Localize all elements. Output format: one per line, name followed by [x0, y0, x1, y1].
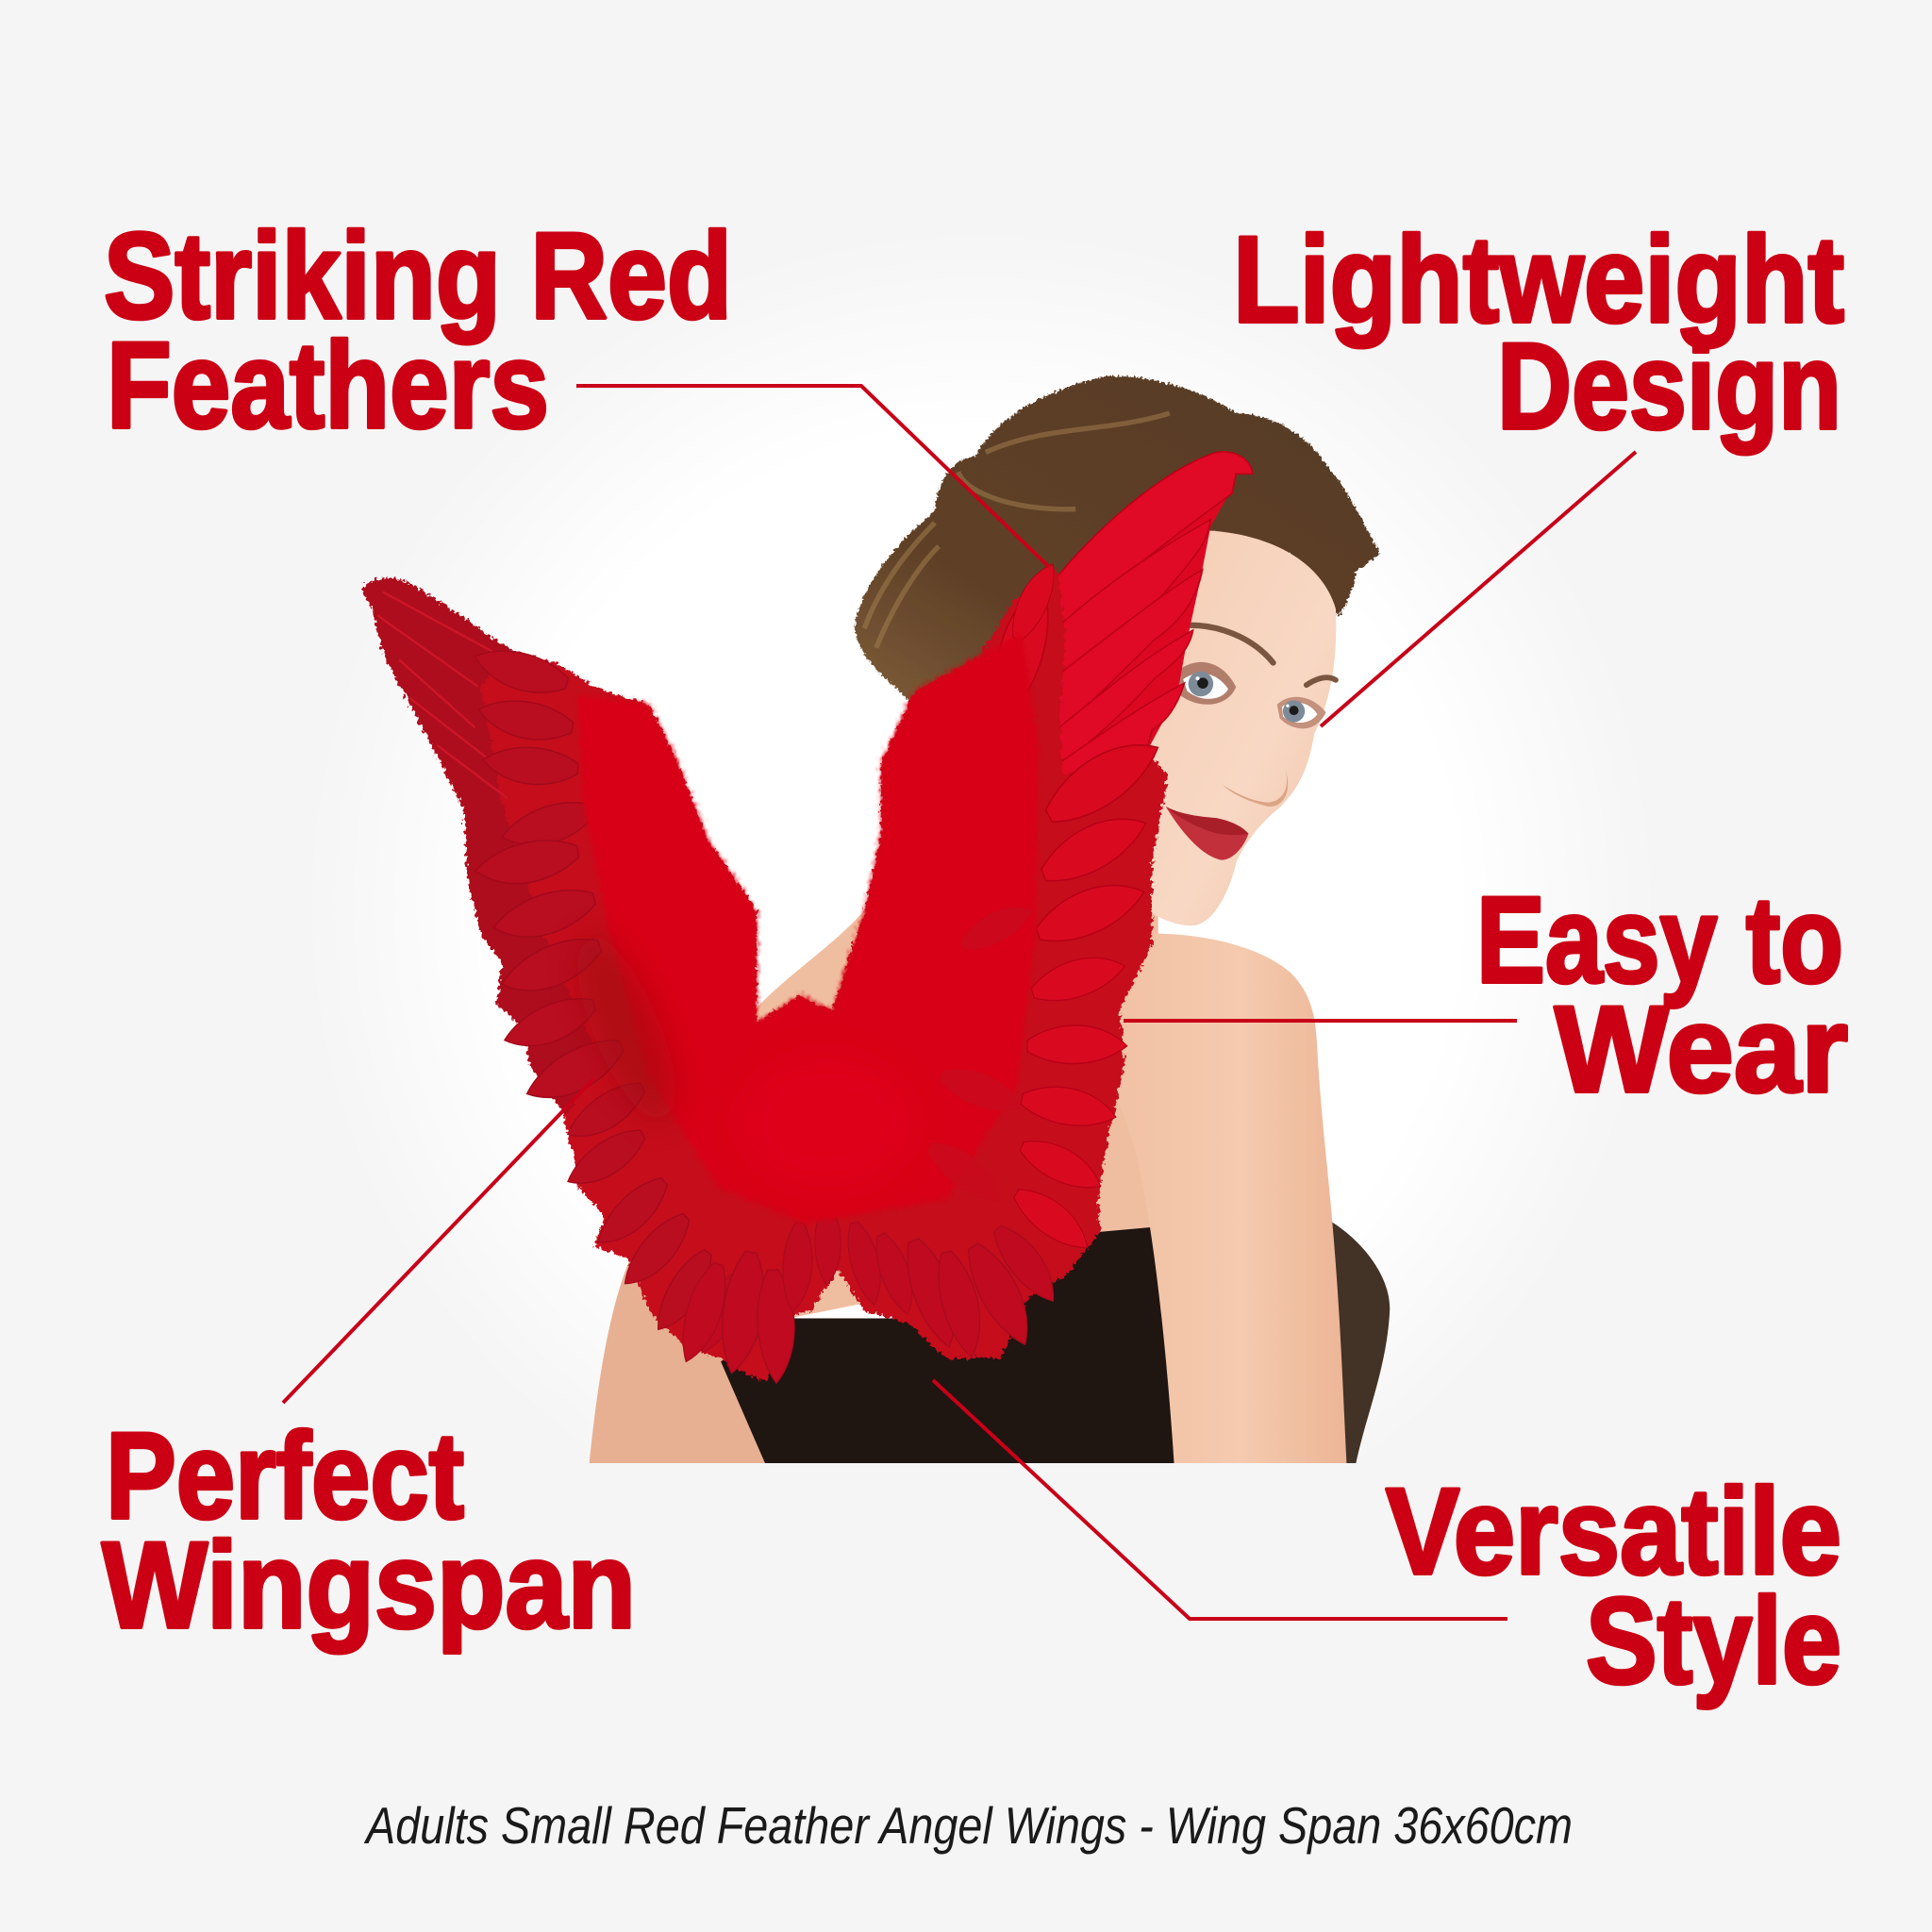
woman's body — [589, 909, 1390, 1466]
feather backing — [1098, 498, 1226, 745]
heading: Perfect Wingspan: Wingspan — [102, 1516, 636, 1654]
heading: Versatile Style: Style — [1586, 1572, 1841, 1709]
face — [1130, 530, 1336, 925]
white photo backdrop — [475, 400, 1487, 1319]
bottom feather fringe — [672, 1206, 1066, 1384]
heading: Versatile Style: Versatile — [1386, 1462, 1841, 1600]
nose — [1223, 769, 1288, 807]
leader line: lightweight design — [1321, 452, 1636, 726]
heading: Easy to Wear — [1476, 871, 1848, 1118]
heading: Lightweight Design: Lightweight — [1233, 210, 1844, 348]
heading: Easy to Wear: Wear — [1555, 980, 1848, 1118]
left wing covert feathers — [471, 641, 722, 1340]
eye right — [1277, 697, 1326, 728]
hair — [855, 376, 1381, 703]
heading: Striking Red Feathers: Striking Red — [104, 207, 732, 344]
eyebrows — [1187, 625, 1336, 685]
black top, back — [721, 1227, 1180, 1466]
heading: Perfect Wingspan — [102, 1407, 636, 1654]
heading: Striking Red Feathers — [104, 207, 732, 454]
left arm — [589, 1257, 766, 1466]
right arm and shoulder — [1150, 934, 1347, 1463]
wing shadow — [558, 923, 695, 1134]
heading: Lightweight Design: Design — [1497, 317, 1841, 455]
bright centre glow — [741, 1058, 913, 1188]
fluffy marabou centre — [578, 633, 1038, 1223]
heading: Lightweight Design — [1233, 210, 1844, 455]
heading: Versatile Style — [1386, 1462, 1841, 1709]
red feather wings — [361, 557, 1168, 1384]
primary feathers right wing — [1057, 451, 1253, 775]
right inner shaded feathers — [922, 895, 1039, 1213]
heading: Easy to Wear: Easy to — [1476, 871, 1843, 1008]
leader line: perfect wingspan — [283, 1078, 594, 1403]
wing silhouette — [361, 568, 1168, 1382]
leader line: striking red feathers — [576, 386, 1049, 567]
leader line: easy to wear — [1124, 1019, 1517, 1023]
heading: Striking Red Feathers: Feathers — [107, 316, 549, 454]
leader line: versatile style — [933, 1380, 1507, 1619]
photo: woman wearing red feather wings — [361, 375, 1487, 1463]
eye left — [1172, 662, 1236, 705]
left wing dark primaries — [361, 578, 600, 1117]
head — [855, 376, 1381, 925]
caption: product name: Adults Small Red Feather Angel Wings - Wing Span 36x60cm — [363, 1796, 1573, 1855]
black top, front — [1328, 1220, 1390, 1466]
feather blades — [1058, 451, 1253, 762]
heading: Perfect Wingspan: Perfect — [106, 1407, 464, 1544]
lips — [1166, 807, 1248, 860]
right wing covert feathers — [984, 557, 1168, 1260]
upper back and neck — [740, 909, 1158, 1319]
left wing quills — [377, 592, 508, 798]
